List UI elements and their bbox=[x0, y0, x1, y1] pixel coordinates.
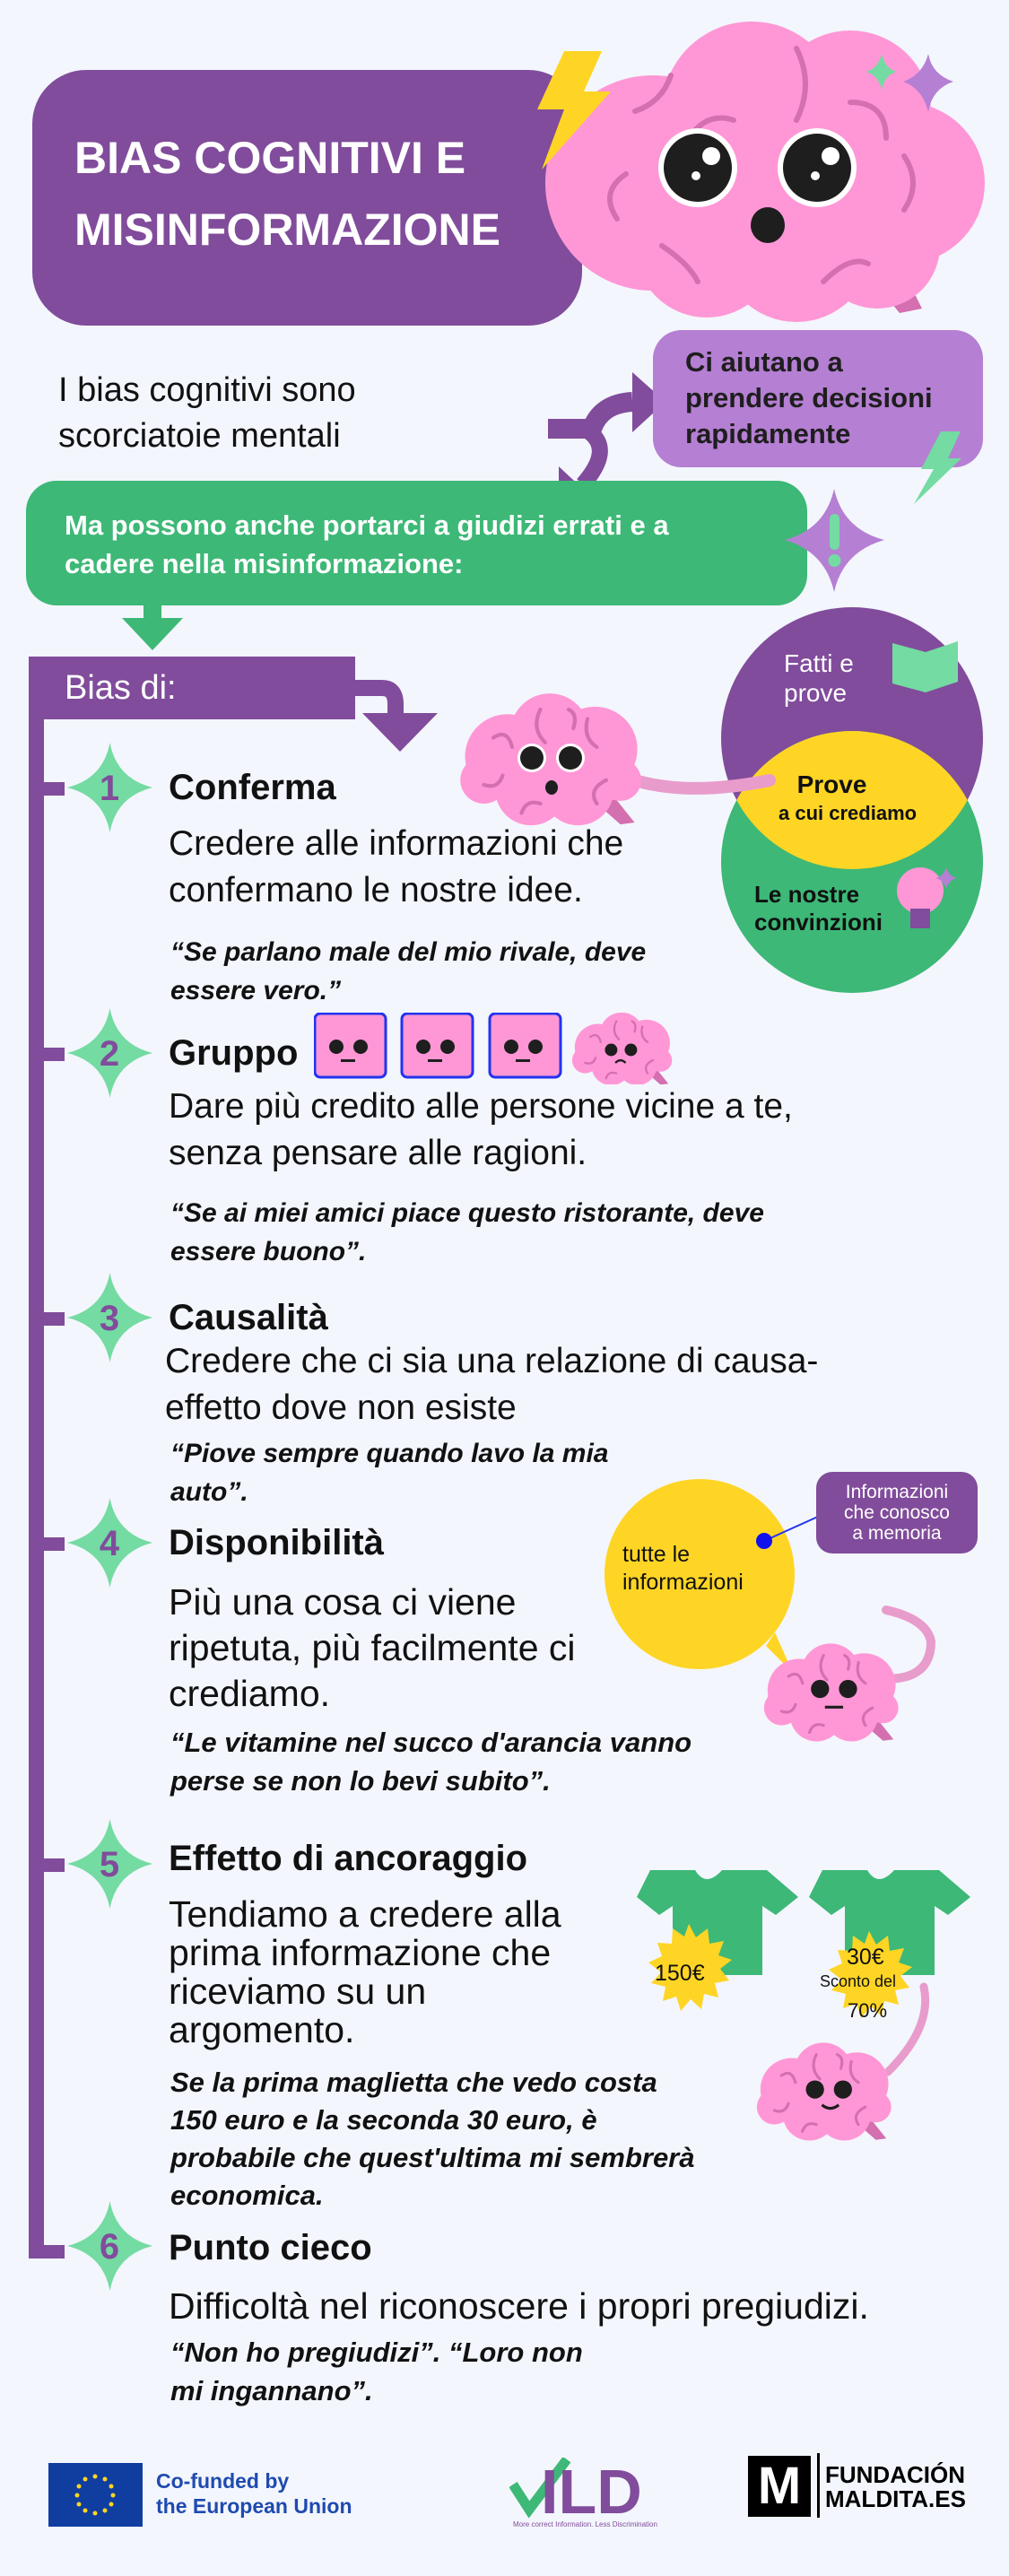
text: 30€ bbox=[847, 1945, 884, 1970]
item 4: “Le vitamine nel succo d'arancia vanno bbox=[170, 1727, 692, 1758]
text: Prove bbox=[797, 770, 866, 798]
item 2: senza pensare alle ragioni. bbox=[169, 1134, 587, 1172]
item 6: mi ingannano”. bbox=[170, 2375, 373, 2406]
bias di header bbox=[29, 657, 355, 719]
title text bbox=[74, 133, 500, 255]
number badge 6: 6 bbox=[100, 2227, 119, 2267]
item 4: ripetuta, più facilmente ci bbox=[169, 1627, 576, 1668]
number badge 3 bbox=[67, 1273, 152, 1362]
group brains icons bbox=[314, 1013, 673, 1084]
icon: sparkles bbox=[865, 54, 953, 112]
brain pointing bbox=[460, 693, 776, 825]
venn labels bbox=[784, 649, 854, 707]
bias di header: Bias di: bbox=[65, 669, 177, 707]
venn diagram bbox=[721, 607, 983, 993]
item 5: economica. bbox=[170, 2180, 324, 2211]
item 6: Punto cieco bbox=[169, 2228, 372, 2267]
text: tutte le bbox=[622, 1542, 690, 1567]
icon: bulb bbox=[897, 867, 944, 914]
item 4: perse se non lo bevi subito”. bbox=[170, 1765, 551, 1797]
item 2: Dare più credito alle persone vicine a te, bbox=[169, 1087, 793, 1126]
number badge 2 bbox=[67, 1008, 152, 1098]
green box: cadere nella misinformazione: bbox=[65, 548, 463, 579]
shirts and price tags bbox=[637, 1870, 970, 2140]
intro text: scorciatoie mentali bbox=[58, 417, 341, 455]
item 3: auto”. bbox=[170, 1477, 248, 1507]
text: 70% bbox=[848, 1999, 887, 2022]
callout: helps decide: rapidamente bbox=[685, 418, 850, 449]
item 2: essere buono”. bbox=[170, 1237, 366, 1266]
number badge 5 bbox=[67, 1819, 152, 1909]
item 6 bbox=[67, 2201, 869, 2406]
item 5: riceviamo su un bbox=[169, 1971, 426, 2012]
green box bbox=[26, 481, 807, 605]
text: Sconto del bbox=[820, 1972, 896, 1990]
number badge 1 bbox=[67, 743, 152, 832]
callout: helps decide: Ci aiutano a bbox=[685, 346, 843, 378]
arrow: bias header bbox=[355, 680, 438, 752]
footer: Fundación Maldita logo: M bbox=[758, 2457, 801, 2515]
item 5: 150 euro e la seconda 30 euro, è bbox=[170, 2104, 597, 2136]
speech bubble: all information bbox=[605, 1479, 816, 1669]
icon: book bbox=[892, 643, 926, 692]
icon: lightning bbox=[537, 51, 611, 170]
item 5: Se la prima maglietta che vedo costa bbox=[170, 2067, 657, 2098]
price labels: 150€ bbox=[655, 1961, 705, 1986]
footer: Fundación Maldita logo: FUNDACIÓN bbox=[825, 2461, 965, 2488]
intro text bbox=[58, 371, 356, 455]
main brain illustration bbox=[545, 22, 985, 322]
item 5: Effetto di ancoraggio bbox=[169, 1839, 527, 1878]
item 1: Credere alle informazioni che bbox=[169, 824, 623, 863]
callout: helps decide: prendere decisioni bbox=[685, 382, 933, 413]
item 3 bbox=[44, 1273, 818, 1507]
item 4 bbox=[44, 1498, 692, 1797]
intro text: I bias cognitivi sono bbox=[58, 371, 356, 409]
item 1: essere vero.” bbox=[170, 976, 341, 1005]
item 2 bbox=[44, 1008, 793, 1266]
text: informazioni bbox=[622, 1570, 744, 1595]
item 1: confermano le nostre idee. bbox=[169, 871, 583, 909]
footer: Fundación Maldita logo bbox=[748, 2453, 966, 2518]
item 2: Gruppo bbox=[169, 1033, 298, 1073]
item 5: probabile che quest'ultima mi sembrerà bbox=[170, 2142, 694, 2173]
item 6: “Non ho pregiudizi”. “Loro non bbox=[170, 2337, 583, 2368]
footer: MILD logo bbox=[509, 2458, 657, 2528]
item 5: Tendiamo a credere alla bbox=[169, 1893, 561, 1935]
title text: BIAS COGNITIVI E bbox=[74, 133, 465, 183]
number badge 2: 2 bbox=[100, 1034, 119, 1074]
item 5 bbox=[44, 1819, 694, 2211]
item 1: “Se parlano male del mio rivale, deve bbox=[170, 937, 646, 967]
timeline line bbox=[29, 664, 44, 2258]
green box: Ma possono anche portarci a giudizi errati e a bbox=[65, 509, 669, 541]
item 1: Conferma bbox=[169, 768, 336, 807]
item 4: Più una cosa ci viene bbox=[169, 1581, 516, 1623]
item 3: effetto dove non esiste bbox=[165, 1388, 517, 1427]
callout: memory label: a memoria bbox=[852, 1523, 942, 1544]
callout: memory label: che conosco bbox=[844, 1502, 950, 1523]
number badge 4 bbox=[67, 1498, 152, 1588]
item 1 bbox=[44, 743, 646, 1005]
icon: exclamation diamond bbox=[785, 489, 884, 592]
callout: helps decide bbox=[653, 330, 983, 467]
venn labels: Fatti e bbox=[784, 649, 854, 677]
footer: MILD logo: More correct Information. Less Discrimination bbox=[513, 2520, 657, 2528]
item 4: Disponibilità bbox=[169, 1523, 384, 1562]
footer: EU logo bbox=[48, 2463, 352, 2527]
number badge 3: 3 bbox=[100, 1299, 119, 1338]
item 6: Difficoltà nel riconoscere i propri pregiudizi. bbox=[169, 2285, 869, 2327]
arrow: down green bbox=[122, 605, 183, 650]
item 5: argomento. bbox=[169, 2009, 354, 2050]
number badge 5: 5 bbox=[100, 1845, 119, 1884]
text: a cui crediamo bbox=[778, 802, 917, 824]
item 3: Credere che ci sia una relazione di causa- bbox=[165, 1342, 818, 1380]
footer: EU logo: Co-funded by bbox=[156, 2469, 289, 2493]
text: Le nostre bbox=[754, 881, 859, 908]
callout: memory label: Informazioni bbox=[846, 1482, 948, 1502]
number badge 6 bbox=[67, 2201, 152, 2291]
item 4: crediamo. bbox=[169, 1673, 330, 1714]
title box bbox=[32, 70, 582, 326]
brain 4 bbox=[764, 1606, 935, 1742]
number badge 4: 4 bbox=[100, 1524, 120, 1563]
item 2: “Se ai miei amici piace questo ristorante, deve bbox=[170, 1198, 764, 1228]
arrows: curved purple bbox=[548, 372, 653, 481]
icon: green lightning bbox=[914, 431, 961, 504]
item 3: “Piove sempre quando lavo la mia bbox=[170, 1439, 608, 1468]
callout: memory label bbox=[816, 1472, 978, 1553]
item 5: prima informazione che bbox=[169, 1932, 551, 1973]
text: convinzioni bbox=[754, 909, 883, 936]
item 3: Causalità bbox=[169, 1298, 328, 1337]
venn labels: prove bbox=[784, 679, 847, 707]
title text: MISINFORMAZIONE bbox=[74, 205, 500, 255]
footer: EU logo: the European Union bbox=[156, 2494, 352, 2518]
footer: Fundación Maldita logo: MALDITA.ES bbox=[825, 2485, 966, 2512]
number badge 1: 1 bbox=[100, 769, 119, 808]
